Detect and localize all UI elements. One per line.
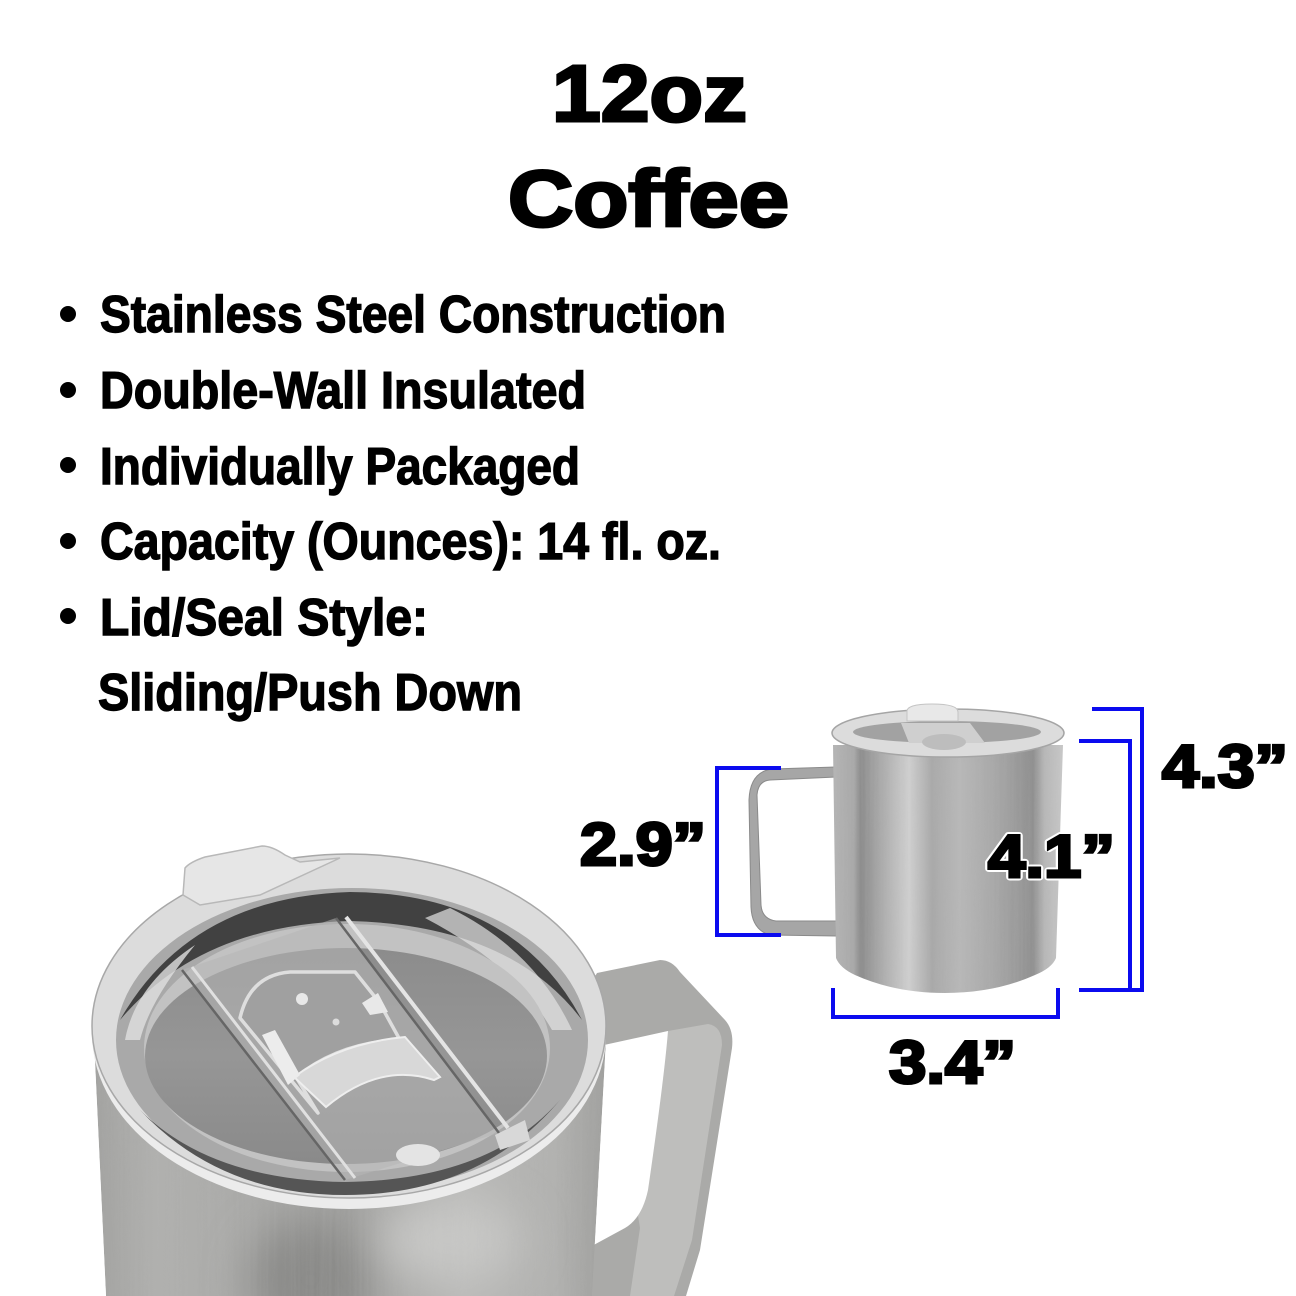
small mug handle — [749, 767, 836, 936]
lid bottom dark seal band — [140, 1100, 560, 1195]
feature bullet list — [60, 286, 726, 722]
dimension label: 2.9 inches: 2.9” — [580, 811, 706, 878]
large mug lid — [92, 846, 606, 1209]
title — [508, 49, 789, 243]
dimension label: 4.1 inches: 4.1” — [988, 823, 1115, 890]
title: Coffee — [508, 154, 789, 243]
large mug close-up photo — [92, 846, 732, 1296]
bracket: width — [833, 988, 1058, 1017]
bracket: handle height — [717, 768, 781, 935]
small mug photo — [749, 704, 1064, 993]
lid inner rim — [116, 888, 588, 1192]
small mug body — [833, 745, 1063, 993]
lid sip tab — [183, 846, 340, 905]
dimension label: 3.4 inches: 3.4” — [889, 1029, 1016, 1096]
lid slider details — [240, 972, 400, 1113]
bracket: total height — [1079, 709, 1142, 990]
lid step band — [144, 924, 550, 1172]
bullet: double wall: Double-Wall Insulated — [100, 362, 586, 420]
bullet: packaging: Individually Packaged — [100, 438, 580, 496]
large mug body — [94, 1040, 606, 1296]
bullet: lid style: Lid/Seal Style: — [100, 589, 428, 647]
small mug lid — [832, 704, 1064, 757]
bullet: lid style — [60, 589, 522, 722]
dimension label: 4.3 inches: 4.3” — [1162, 733, 1288, 800]
large mug handle — [590, 960, 732, 1296]
bracket: body height — [1079, 741, 1130, 990]
bullet: stainless steel: Stainless Steel Construction — [100, 286, 726, 344]
dimension brackets — [717, 709, 1142, 1017]
lid sliding strip — [195, 918, 494, 1164]
dimension label: 4.1 inches: 4.1” — [988, 823, 1115, 890]
bullet: lid style: Sliding/Push Down — [98, 664, 522, 722]
title: 12oz — [552, 49, 747, 138]
bullet: capacity: Capacity (Ounces): 14 fl. oz. — [100, 513, 721, 571]
lid recessed well — [145, 948, 547, 1164]
